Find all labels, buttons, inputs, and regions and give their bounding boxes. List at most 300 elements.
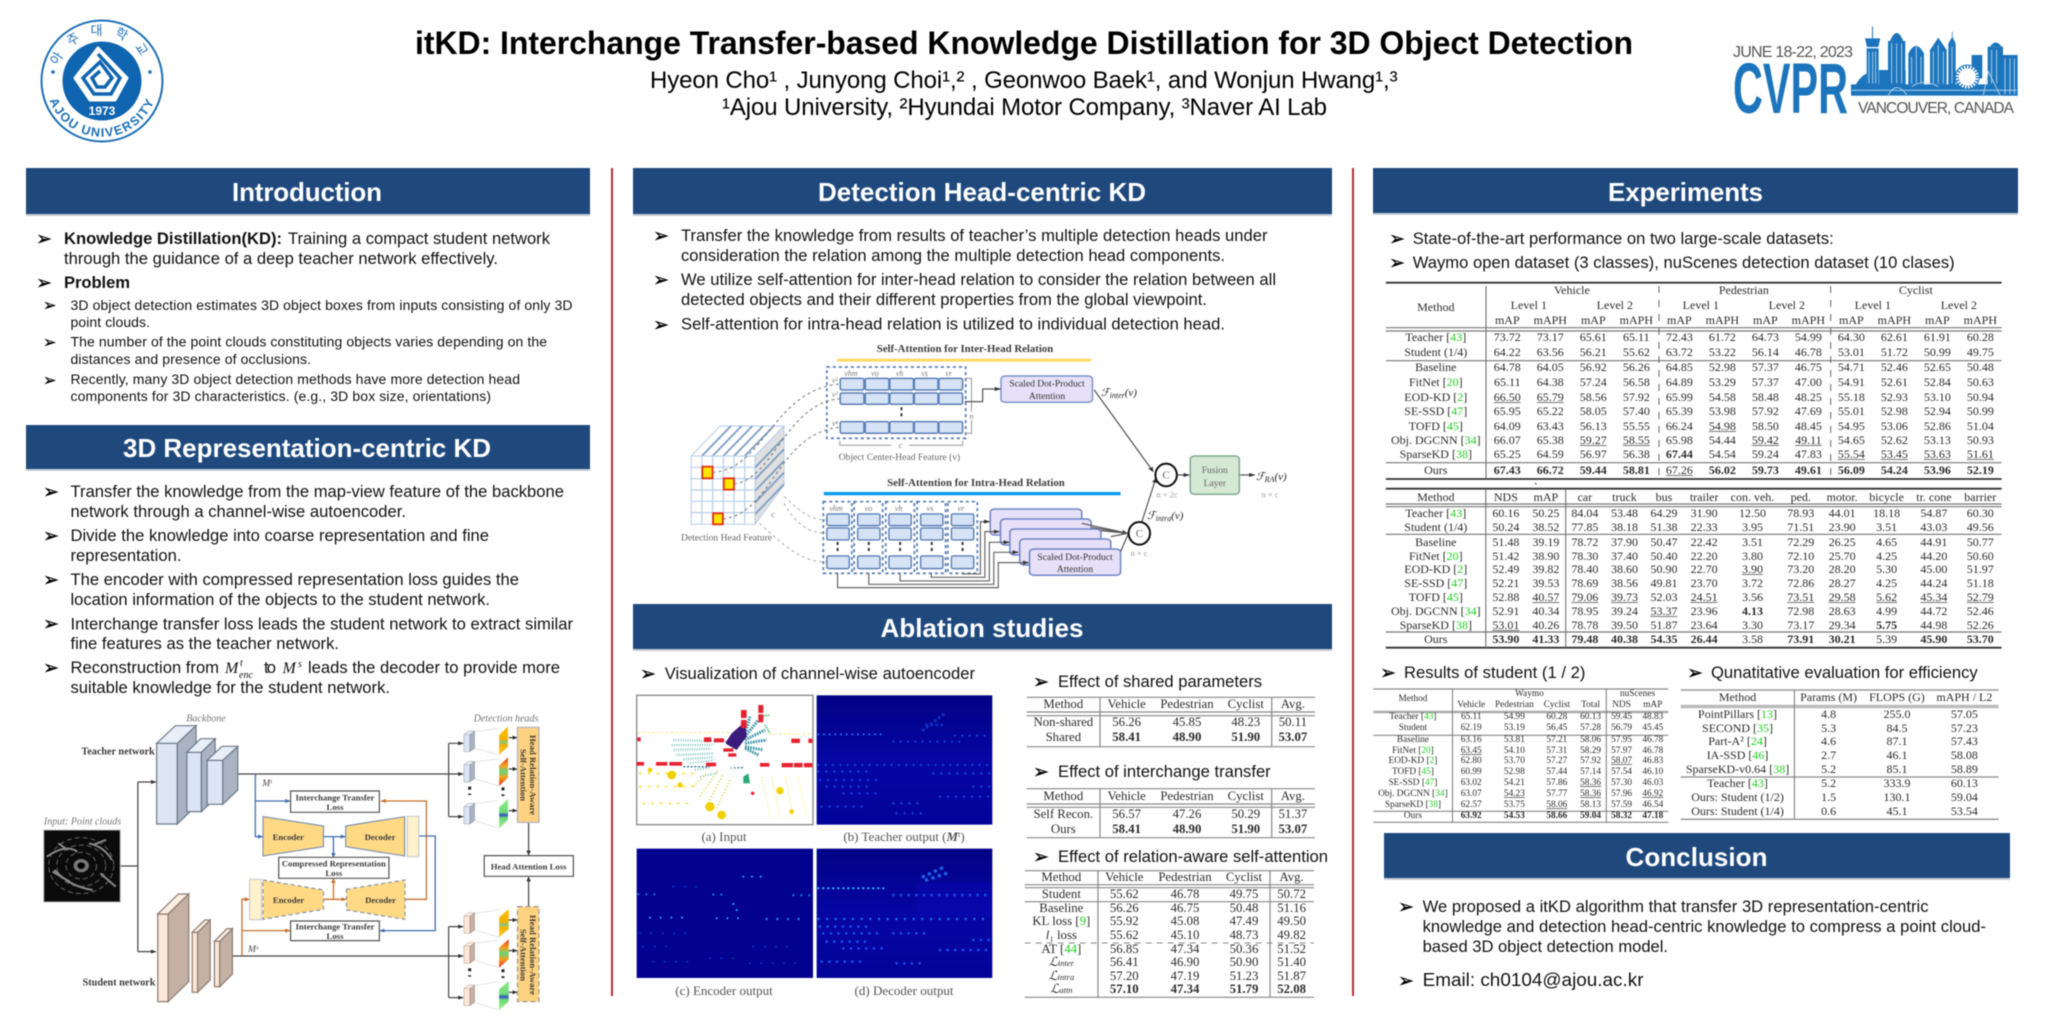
table: Waymo results: 52.19: [1967, 463, 1994, 477]
dashed feature connectors: [713, 384, 840, 562]
table: nuScenes results: 78.72: [1571, 535, 1598, 549]
text block: 3D representation bullets: M: [282, 660, 298, 677]
text: visualization bullet: Visualization of channel-wise autoencoder: [665, 664, 975, 683]
figure: channel-wise autoencoder visualization: [637, 695, 992, 978]
table: student results: Obj. DGCNN [34]: [1378, 789, 1448, 799]
table: efficiency: SparseKD-v0.64 [38]: [1686, 762, 1789, 776]
table: Waymo results: 55.01: [1838, 404, 1865, 418]
table: efficiency: 4.8: [1821, 707, 1836, 721]
diagram labels: Self-Attention: [518, 929, 528, 981]
text block: 3D representation bullets: M: [224, 660, 240, 677]
table: relation-aware self-attention: 46.75: [1171, 901, 1199, 915]
detection diagram labels: vs: [927, 504, 933, 513]
table: Waymo results: 54.65: [1838, 433, 1865, 447]
table: interchange transfer: 47.26: [1173, 807, 1201, 821]
table: Waymo results: 60.28: [1967, 330, 1994, 344]
title: itKD: Interchange Transfer-based Knowledge Distillation for 3D Object Detection: [415, 25, 1633, 61]
table: Waymo results: mAPH: [1706, 313, 1739, 327]
text: effect of relation-aware self-attention: Effect of relation-aware self-attention: [1058, 847, 1328, 866]
table: nuScenes results: FitNet [20]: [1409, 549, 1463, 563]
table: nuScenes results: 38.18: [1611, 520, 1638, 534]
table: Waymo results: 54.95: [1838, 419, 1865, 433]
table: student results: FitNet [20]: [1392, 746, 1434, 756]
table: nuScenes results: 39.53: [1532, 576, 1559, 590]
table: Waymo results: 65.11: [1623, 330, 1650, 344]
table: nuScenes results: 78.69: [1571, 576, 1598, 590]
table: relation-aware self-attention: 51.23: [1230, 969, 1258, 983]
text block: conclusion: Email: ch0104@ajou.ac.kr: [1423, 970, 1644, 991]
detection diagram labels: Fusion: [1202, 465, 1228, 476]
table: nuScenes results: 3.56: [1742, 590, 1763, 604]
table: nuScenes results: 25.70: [1829, 549, 1856, 563]
table: student results: 54.23: [1504, 789, 1525, 799]
table: nuScenes results: 50.40: [1650, 549, 1677, 563]
table: nuScenes results: 38.52: [1532, 520, 1559, 534]
table: nuScenes results: 51.38: [1650, 520, 1677, 534]
heading: Detection Head-centric KD: Detection Head-centric KD: [818, 177, 1146, 207]
table: efficiency: IA-SSD [46]: [1707, 748, 1768, 762]
icon: CVPR 2023 Vancouver logo: CVPR: [1733, 50, 1848, 129]
text block: detection head bullets: ➢: [653, 225, 669, 247]
table: Waymo results: mAPH: [1620, 313, 1653, 327]
text block: 3D representation bullets: leads the decoder to provide more: [308, 658, 560, 677]
table: nuScenes results: SparseKD [38]: [1400, 618, 1472, 632]
table: Waymo results: 52.98: [1881, 404, 1908, 418]
text block: experiment bullets: Waymo open dataset (3 classes), nuScenes detection dataset (10 clases): [1413, 253, 1955, 272]
text block: 3D representation bullets: network through a channel-wise autoencoder.: [70, 502, 406, 521]
diagram labels: Decoder: [365, 832, 396, 842]
table: student results: 53.75: [1504, 800, 1525, 810]
text block: experiment bullets: State-of-the-art performance on two large-scale datasets:: [1413, 229, 1834, 248]
detection diagram labels: vⁿ: [832, 419, 839, 428]
table: Waymo results: 67.43: [1494, 463, 1521, 477]
table: Waymo results: 63.72: [1666, 345, 1693, 359]
table: Waymo results: 52.65: [1924, 360, 1951, 374]
table: student results: 56.45: [1546, 723, 1567, 733]
detection diagram labels: Self-Attention for Intra-Head Relation: [887, 477, 1065, 489]
table: relation-aware self-attention: 56.85: [1110, 942, 1139, 956]
table: efficiency: 45.1: [1886, 804, 1907, 818]
captions: autoencoder figure: t: [958, 830, 961, 839]
table: nuScenes results: 4.99: [1876, 604, 1897, 618]
table: Waymo results: 53.45: [1881, 447, 1908, 461]
table: relation-aware self-attention: 47.34: [1171, 942, 1199, 956]
table: nuScenes results: mAP: [1533, 490, 1558, 504]
table: nuScenes results: 24.51: [1691, 590, 1718, 604]
detection diagram labels: c: [771, 510, 775, 519]
table: relation-aware self-attention: 47.19: [1171, 969, 1199, 983]
detection diagram labels: (v): [1125, 387, 1137, 399]
table: Waymo results: 58.56: [1580, 390, 1607, 404]
table: student results: 63.02: [1461, 778, 1482, 788]
table: Waymo results: 65.98: [1666, 433, 1693, 447]
table: Waymo results: Level 2: [1597, 298, 1633, 312]
icon: Ajou University seal: 아주대학교: [50, 23, 148, 64]
table: Waymo results: mAP: [1753, 313, 1778, 327]
heading: Experiments: [1373, 168, 2018, 215]
table: interchange transfer: Self Recon.: [1033, 807, 1093, 821]
table: nuScenes results: 73.20: [1787, 562, 1814, 576]
table: Waymo results: 52.93: [1881, 390, 1908, 404]
table: nuScenes results: 3.80: [1742, 549, 1763, 563]
table: student results: 63.07: [1461, 789, 1482, 799]
text block: conclusion: knowledge and detection head-centric knowledge to compress a point cloud-: [1423, 917, 1986, 936]
table: Waymo results: 54.24: [1881, 463, 1908, 477]
table: nuScenes results: 49.81: [1650, 576, 1677, 590]
table: student results: 57.77: [1546, 789, 1567, 799]
text block: detection head bullets: detected objects and their different properties from the global viewpoint.: [681, 290, 1207, 309]
table: student results: 46.78: [1642, 746, 1663, 756]
table: Waymo results: 56.02: [1709, 463, 1736, 477]
image: (d) decoder output: [817, 849, 992, 978]
table: Waymo results: 56.14: [1752, 345, 1779, 359]
table: Waymo results: 50.99: [1967, 404, 1994, 418]
table: student results: 62.19: [1461, 723, 1482, 733]
table: Waymo results: 64.85: [1666, 360, 1693, 374]
table: Waymo results: mAP: [1495, 313, 1520, 327]
table: Waymo results: 64.38: [1537, 375, 1564, 389]
table: Waymo results: Level 2: [1941, 298, 1977, 312]
detection heads: [464, 727, 539, 1010]
text block: 3D representation bullets: suitable knowledge for the student network.: [70, 678, 390, 697]
table: relation-aware self-attention: 50.48: [1230, 901, 1258, 915]
table: student results: 59.04: [1580, 811, 1601, 821]
table: nuScenes results: 77.85: [1571, 520, 1598, 534]
table: Waymo results: Vehicle: [1554, 283, 1590, 297]
table: Waymo results: 65.39: [1666, 404, 1693, 418]
table: Waymo results: 64.73: [1752, 330, 1779, 344]
table: Waymo results: 53.01: [1838, 345, 1865, 359]
table: shared parameters: 56.26: [1112, 715, 1141, 729]
table: shared parameters: Shared: [1046, 730, 1081, 744]
heading: 3D Representation-centric KD: 3D Representation-centric KD: [123, 433, 491, 463]
table: Waymo results: Pedestrian: [1719, 283, 1769, 297]
teacher backbone blocks: [157, 726, 238, 824]
table: Waymo results: 66.07: [1494, 433, 1521, 447]
table: nuScenes results: 72.10: [1787, 549, 1814, 563]
table: nuScenes results: 39.19: [1532, 535, 1559, 549]
text block: experiment bullets: ➢: [1389, 228, 1405, 250]
table: Waymo results: 55.18: [1838, 390, 1865, 404]
text: results of student: Results of student (1 / 2): [1404, 663, 1585, 682]
table: nuScenes results: con. veh.: [1731, 490, 1774, 504]
text block: conclusion: based 3D object detection model.: [1423, 937, 1668, 956]
table: student results: 57.31: [1546, 746, 1567, 756]
table: student results: 57.44: [1546, 767, 1567, 777]
table: nuScenes results: Ours: [1424, 632, 1447, 646]
table: relation-aware self-attention: 55.62: [1110, 887, 1139, 901]
table: nuScenes results: 50.77: [1967, 535, 1994, 549]
diagram labels: Teacher network: [81, 746, 155, 758]
encoder and decoder blocks: [250, 816, 419, 920]
table: Waymo results: 50.63: [1967, 375, 1994, 389]
table: efficiency: 333.9: [1883, 776, 1910, 790]
table: Waymo results: 66.72: [1537, 463, 1564, 477]
table: interchange transfer: 53.07: [1278, 822, 1307, 836]
table: Waymo results: 57.24: [1580, 375, 1607, 389]
text block: 3D representation bullets: Reconstruction from: [70, 658, 219, 677]
table: nuScenes results: 43.03: [1920, 520, 1947, 534]
diagram labels: Detection heads: [473, 714, 538, 724]
panel: right column: [1373, 168, 2018, 992]
table: efficiency: 57.23: [1951, 721, 1978, 735]
table: nuScenes results: 52.26: [1967, 618, 1994, 632]
table: relation-aware self-attention: ℒattn: [1050, 982, 1073, 996]
table: shared parameters: 45.85: [1173, 715, 1201, 729]
table: nuScenes results: 23.64: [1691, 618, 1718, 632]
table: Waymo results: 56.21: [1580, 345, 1607, 359]
table: student results: 46.03: [1642, 778, 1663, 788]
table: nuScenes results: 44.98: [1920, 618, 1947, 632]
table: Waymo results: 53.29: [1709, 375, 1736, 389]
text block: introduction: ➢: [43, 296, 56, 314]
table: nuScenes results: ped.: [1791, 490, 1811, 504]
text block: 3D representation bullets: Transfer the knowledge from the map-view feature of the backbone: [70, 482, 564, 501]
table: nuScenes results: 5.30: [1876, 562, 1897, 576]
table: student results: 57.54: [1611, 767, 1632, 777]
table: Waymo results: 64.89: [1666, 375, 1693, 389]
table: nuScenes results: 26.44: [1691, 632, 1718, 646]
detection diagram labels: inter: [1110, 391, 1126, 400]
table: nuScenes results: 51.48: [1492, 535, 1519, 549]
fusion connectors: [965, 389, 1255, 552]
table: Waymo results: 56.58: [1623, 375, 1650, 389]
diagram labels: Decoder: [365, 895, 396, 905]
table: Waymo results: 50.99: [1924, 345, 1951, 359]
table: interchange transfer: Avg.: [1281, 789, 1305, 803]
detection diagram labels: Detection Head Feature: [681, 532, 772, 544]
table: student results: Ours: [1404, 811, 1422, 821]
table: nuScenes results: 60.16: [1492, 506, 1519, 520]
diagram labels: Self-Attention: [518, 749, 528, 801]
table: Waymo results: 59.27: [1580, 433, 1607, 447]
table: interchange transfer: 58.41: [1112, 822, 1141, 836]
concat nodes: [1129, 464, 1177, 545]
table: student results: 46.78: [1642, 735, 1663, 745]
table: Waymo results: 49.61: [1795, 463, 1822, 477]
table: nuScenes results: 78.93: [1787, 506, 1814, 520]
table: student results: 58.36: [1580, 778, 1601, 788]
table: nuScenes results: 52.46: [1967, 604, 1994, 618]
heading: Introduction: [26, 168, 590, 216]
diagram labels: Head Attention Loss: [491, 862, 567, 872]
table: efficiency: 4.6: [1821, 734, 1836, 748]
text block: experiment bullets: ➢: [1389, 252, 1405, 274]
table: nuScenes results: 23.90: [1829, 520, 1856, 534]
table: Waymo results: 59.42: [1752, 433, 1779, 447]
text block: 3D representation bullets: ➢: [43, 481, 59, 503]
table: Waymo results: 54.71: [1838, 360, 1865, 374]
table: student results: Method: [1398, 694, 1427, 704]
detection diagram labels: vr: [958, 504, 965, 513]
table: nuScenes results: 37.40: [1611, 549, 1638, 563]
table: relation-aware self-attention: 45.10: [1171, 928, 1199, 942]
table: Waymo results: 58.05: [1580, 404, 1607, 418]
heading: Introduction: Introduction: [232, 177, 382, 207]
table: shared parameters: 53.07: [1278, 730, 1307, 744]
table: nuScenes results: 5.75: [1876, 618, 1897, 632]
table: student results: 62.80: [1461, 756, 1482, 766]
table: relation-aware self-attention: ℒintra: [1048, 969, 1074, 983]
table: student results: Vehicle: [1457, 700, 1485, 710]
table: student results: 60.13: [1580, 712, 1601, 722]
table: Waymo results: 58.55: [1623, 433, 1650, 447]
image: (c) encoder output: [637, 849, 813, 978]
table: nuScenes results: 39.73: [1611, 590, 1638, 604]
text block: conclusion: [1398, 896, 1986, 992]
table: efficiency: 58.89: [1951, 762, 1978, 776]
table: Waymo results: FitNet [20]: [1409, 375, 1463, 389]
table: shared parameters: Avg.: [1281, 698, 1305, 711]
table: student results: 57.21: [1546, 735, 1567, 745]
table: shared parameters: Non-shared: [1033, 715, 1093, 729]
panel: left column: [26, 168, 590, 1010]
captions: autoencoder figure: (c) Encoder output: [675, 983, 773, 998]
table: Waymo results: 47.69: [1795, 404, 1822, 418]
fusion layer: [1190, 456, 1239, 494]
table: student results: 65.11: [1461, 712, 1482, 722]
text block: introduction: [36, 228, 572, 404]
table: nuScenes results: 40.38: [1611, 632, 1638, 646]
detection diagram labels: RA: [1264, 475, 1275, 484]
table: nuScenes results: 53.01: [1492, 618, 1519, 632]
table: nuScenes results: 3.90: [1742, 562, 1763, 576]
table: student results: 58.13: [1580, 800, 1601, 810]
table: Waymo results: 48.25: [1795, 390, 1822, 404]
table: nuScenes results: 52.03: [1650, 590, 1677, 604]
table: Waymo results: 57.92: [1623, 390, 1650, 404]
table: interchange transfer: 48.90: [1173, 822, 1201, 836]
panel: middle column: [633, 168, 1332, 999]
table: Waymo results: 52.46: [1881, 360, 1908, 374]
detection diagram labels: vr: [945, 369, 953, 378]
diagram: relation-aware self-attention: [681, 343, 1287, 588]
diagram labels: Mᵗ: [261, 779, 273, 789]
table: Waymo results: 64.22: [1494, 345, 1521, 359]
table: nuScenes results: 72.29: [1787, 535, 1814, 549]
diagram labels: Backbone: [186, 714, 226, 724]
table: relation-aware self-attention: 51.79: [1230, 982, 1258, 996]
table: relation-aware self-attention: 46.90: [1171, 955, 1199, 969]
table: Waymo results: 59.44: [1580, 463, 1607, 477]
table: nuScenes results: 52.91: [1492, 604, 1519, 618]
table: Waymo results: mAP: [1839, 313, 1864, 327]
table: nuScenes results: 51.18: [1967, 576, 1994, 590]
detection diagram labels: Attention: [1029, 391, 1065, 402]
table: nuScenes results: 49.56: [1967, 520, 1994, 534]
table: student results: Total: [1581, 700, 1600, 710]
table: Waymo results: 65.79: [1537, 390, 1564, 404]
table: Waymo results: 52.94: [1924, 404, 1951, 418]
detection diagram labels: n × c: [1130, 548, 1148, 558]
text block: 3D representation bullets: t: [240, 658, 243, 669]
table: nuScenes results: 73.91: [1787, 632, 1814, 646]
table: relation-aware self-attention: [1025, 871, 1317, 999]
table: relation-aware self-attention: 49.82: [1277, 928, 1306, 942]
inter-head feature grid: [827, 367, 971, 445]
table: shared parameters: 50.11: [1279, 715, 1307, 729]
table: Waymo results: 65.11: [1494, 375, 1521, 389]
table: Waymo results: 53.96: [1924, 463, 1951, 477]
table: nuScenes results: 64.29: [1650, 506, 1677, 520]
table: Waymo results: Teacher [43]: [1405, 330, 1466, 344]
table: Waymo results: [1386, 283, 2004, 484]
detection diagram labels: vo: [871, 369, 879, 378]
table: student results: 46.83: [1642, 756, 1663, 766]
table: Waymo results: 55.54: [1838, 447, 1865, 461]
table: nuScenes results: bicycle: [1869, 490, 1904, 504]
table: student results: 57.95: [1611, 735, 1632, 745]
image: (a) input: [637, 695, 813, 825]
table: Waymo results: TOFD [45]: [1409, 419, 1463, 433]
detection diagram labels: n: [970, 412, 974, 421]
detection diagram labels: Scaled Dot-Product: [1009, 378, 1085, 390]
table: relation-aware self-attention: 47.49: [1230, 914, 1258, 928]
table: efficiency: 46.1: [1886, 748, 1907, 762]
table: efficiency: 255.0: [1883, 707, 1910, 721]
table: nuScenes results: 50.47: [1650, 535, 1677, 549]
table: nuScenes results: 18.18: [1873, 506, 1900, 520]
table: efficiency: 0.6: [1821, 804, 1836, 818]
table: Waymo results: Student (1/4): [1404, 345, 1467, 359]
image: (b) teacher output: [817, 695, 992, 825]
table: nuScenes results: 52.49: [1492, 562, 1519, 576]
table: Waymo results: 57.40: [1623, 404, 1650, 418]
table: Waymo results: 57.92: [1752, 404, 1779, 418]
table: Waymo results: SparseKD [38]: [1400, 447, 1472, 461]
table: nuScenes results: 78.95: [1571, 604, 1598, 618]
divider: column 2-3: [1352, 168, 1354, 996]
table: nuScenes results: 38.60: [1611, 562, 1638, 576]
table: nuScenes results: 41.33: [1532, 632, 1559, 646]
table: Waymo results: EOD-KD [2]: [1404, 390, 1467, 404]
table: efficiency: Teacher [43]: [1707, 776, 1768, 790]
table: student results: 59.45: [1611, 712, 1632, 722]
table: nuScenes results: 4.25: [1876, 576, 1897, 590]
captions: autoencoder figure: (b) Teacher output (M: [843, 829, 958, 844]
table: nuScenes results: 40.34: [1532, 604, 1559, 618]
table: nuScenes results: 38.90: [1532, 549, 1559, 563]
icon: Ajou University seal: AJOU UNIVERSITY: [48, 98, 154, 138]
table: nuScenes results: Method: [1417, 490, 1454, 504]
table: efficiency: 57.05: [1951, 707, 1978, 721]
text: effect of relation-aware self-attention: ➢: [1033, 846, 1049, 868]
table: nuScenes results: 28.63: [1829, 604, 1856, 618]
table: Waymo results: 52.86: [1924, 419, 1951, 433]
diagram labels: Head Relation-Aware: [528, 735, 538, 815]
text block: 3D representation bullets: ➢: [43, 525, 59, 547]
table: efficiency: mAPH / L2: [1936, 690, 1992, 704]
table: student results: 54.21: [1504, 778, 1525, 788]
table: Waymo results: 53.63: [1924, 447, 1951, 461]
table: relation-aware self-attention: 51.16: [1277, 901, 1306, 915]
text block: detection head bullets: [653, 225, 1276, 336]
table: interchange transfer: Vehicle: [1107, 789, 1146, 803]
intra-head relation bar: [824, 492, 1121, 495]
table: efficiency: 1.5: [1821, 790, 1836, 804]
table: interchange transfer: Method: [1043, 789, 1083, 803]
table: student results: 58.32: [1611, 811, 1632, 821]
table: relation-aware self-attention: 52.08: [1277, 982, 1306, 996]
table: nuScenes results: car: [1577, 490, 1592, 504]
table: Waymo results: 54.54: [1709, 447, 1736, 461]
table: nuScenes results: 39.50: [1611, 618, 1638, 632]
table: Waymo results: 50.94: [1967, 390, 1994, 404]
icon: Ajou University seal: 1973: [89, 104, 116, 118]
table: Waymo results: 63.56: [1537, 345, 1564, 359]
table: student results: Teacher [43]: [1389, 712, 1436, 722]
table: Waymo results: 52.61: [1881, 375, 1908, 389]
